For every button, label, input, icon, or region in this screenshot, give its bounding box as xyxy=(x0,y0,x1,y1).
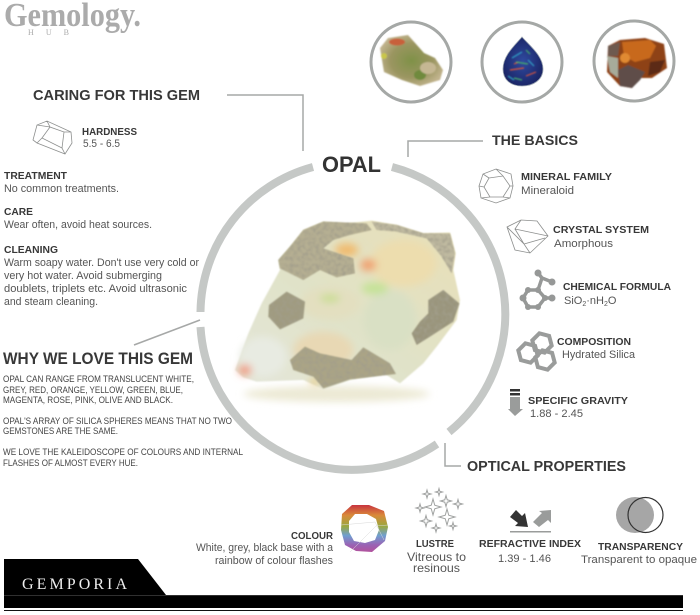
refractive index text xyxy=(479,539,581,565)
heading: why we love this gem: WHY WE LOVE THIS GEM xyxy=(3,349,193,368)
icon: lustre sparkles xyxy=(416,488,462,532)
crystal system text xyxy=(553,225,649,250)
cleaning text: Warm soapy water. Don't use very cold or xyxy=(4,257,199,269)
icon: colour rainbow ring xyxy=(341,505,388,552)
cleaning text xyxy=(4,245,199,308)
icon: crystal system xyxy=(507,220,548,253)
lustre text: LUSTRE xyxy=(416,539,454,550)
why we love text block: FLASHES OF ALMOST EVERY HUE. xyxy=(3,458,138,468)
crystal system text: CRYSTAL SYSTEM xyxy=(553,225,649,236)
title: OPAL: OPAL xyxy=(322,152,381,177)
cleaning text: very hot water. Avoid submerging xyxy=(4,270,162,282)
heading: the basics: THE BASICS xyxy=(492,132,578,148)
main opal rock image xyxy=(235,221,460,402)
specific gravity text: 1.88 - 2.45 xyxy=(530,408,583,420)
icon: composition hexagons xyxy=(518,333,555,370)
chemical formula text: CHEMICAL FORMULA xyxy=(563,282,671,293)
chemical formula text: O xyxy=(608,295,617,307)
refractive index text: 1.39 - 1.46 xyxy=(498,553,551,565)
specific gravity text: SPECIFIC GRAVITY xyxy=(528,396,628,407)
refractive index text: REFRACTIVE INDEX xyxy=(479,539,581,550)
why we love text block: WE LOVE THE KALEIDOSCOPE OF COLOURS AND INTERNAL xyxy=(3,447,243,457)
care text: Wear often, avoid heat sources. xyxy=(4,219,152,231)
colour text: rainbow of colour flashes xyxy=(215,555,333,567)
crystal system text: Amorphous xyxy=(554,238,614,250)
heading: caring for this gem: CARING FOR THIS GEM xyxy=(33,87,200,104)
chemical formula text: 2 xyxy=(604,301,608,308)
transparency text: Transparent to opaque xyxy=(581,554,697,566)
mineral family text xyxy=(521,172,612,197)
transparency text: TRANSPARENCY xyxy=(598,542,683,553)
cleaning text: and steam cleaning. xyxy=(4,296,98,308)
hardness text xyxy=(82,127,137,150)
why we love text block: OPAL'S ARRAY OF SILICA SPHERES MEANS THAT NO TWO xyxy=(3,416,232,426)
gem photo: fire opal circle xyxy=(594,21,674,101)
why we love text block: OPAL CAN RANGE FROM TRANSLUCENT WHITE, xyxy=(3,374,194,384)
gem photo: black opal cabochon circle xyxy=(482,22,562,102)
mineral family text: MINERAL FAMILY xyxy=(521,172,612,183)
hardness text: 5.5 - 6.5 xyxy=(83,138,120,150)
lustre text: Vitreous to xyxy=(407,550,466,564)
specific gravity text xyxy=(528,396,628,420)
colour text xyxy=(196,531,334,567)
composition text xyxy=(557,337,636,361)
icon: hardness crystal xyxy=(33,121,72,154)
cleaning text: CLEANING xyxy=(4,245,58,256)
lustre text: resinous xyxy=(413,561,460,575)
chemical formula text xyxy=(563,282,671,308)
mineral family text: Mineraloid xyxy=(521,185,574,197)
why we love text block xyxy=(3,374,243,468)
gem photo: rough opal circle xyxy=(371,22,451,102)
icon: specific gravity arrow xyxy=(508,389,523,416)
heading: optical properties: OPTICAL PROPERTIES xyxy=(467,459,626,475)
cleaning text: doublets, triplets etc. Avoid ultrasonic xyxy=(4,283,187,295)
footer bar with Gemporia tab: GEMPORIA xyxy=(22,576,127,593)
treatment text xyxy=(4,171,119,195)
colour text: White, grey, black base with a xyxy=(196,542,334,554)
transparency text xyxy=(581,542,697,566)
central ring xyxy=(200,167,505,470)
footer bar with Gemporia tab xyxy=(4,559,683,611)
treatment text: No common treatments. xyxy=(4,183,119,195)
icon: refractive index arrows xyxy=(510,510,551,532)
why we love text block: GEMSTONES ARE THE SAME. xyxy=(3,426,118,436)
treatment text: TREATMENT xyxy=(4,171,67,182)
chemical formula text: 2 xyxy=(582,301,586,308)
icon: chemical formula xyxy=(520,270,556,310)
hardness text: HARDNESS xyxy=(82,127,137,138)
icon: transparency circles xyxy=(616,497,663,533)
chemical formula text: ·nH xyxy=(586,295,604,307)
colour text: COLOUR xyxy=(291,531,334,542)
composition text: Hydrated Silica xyxy=(562,349,636,361)
lustre text xyxy=(407,539,466,575)
connector: why we love to ring xyxy=(134,320,200,345)
logo: Gemology Hub: HUB xyxy=(28,28,69,37)
care text xyxy=(4,207,152,231)
chemical formula text: SiO xyxy=(564,295,582,307)
icon: dodecahedron xyxy=(479,169,513,203)
care text: CARE xyxy=(4,207,33,218)
connector: basics to title xyxy=(408,141,483,157)
connector: caring to title xyxy=(227,95,303,151)
why we love text block: MAGENTA, ROSE, PINK, OLIVE AND BLACK. xyxy=(3,395,173,405)
why we love text block: GREY, RED, ORANGE, YELLOW, GREEN, BLUE, xyxy=(3,385,183,395)
connector: optical properties to ring xyxy=(445,443,461,466)
composition text: COMPOSITION xyxy=(557,337,631,348)
